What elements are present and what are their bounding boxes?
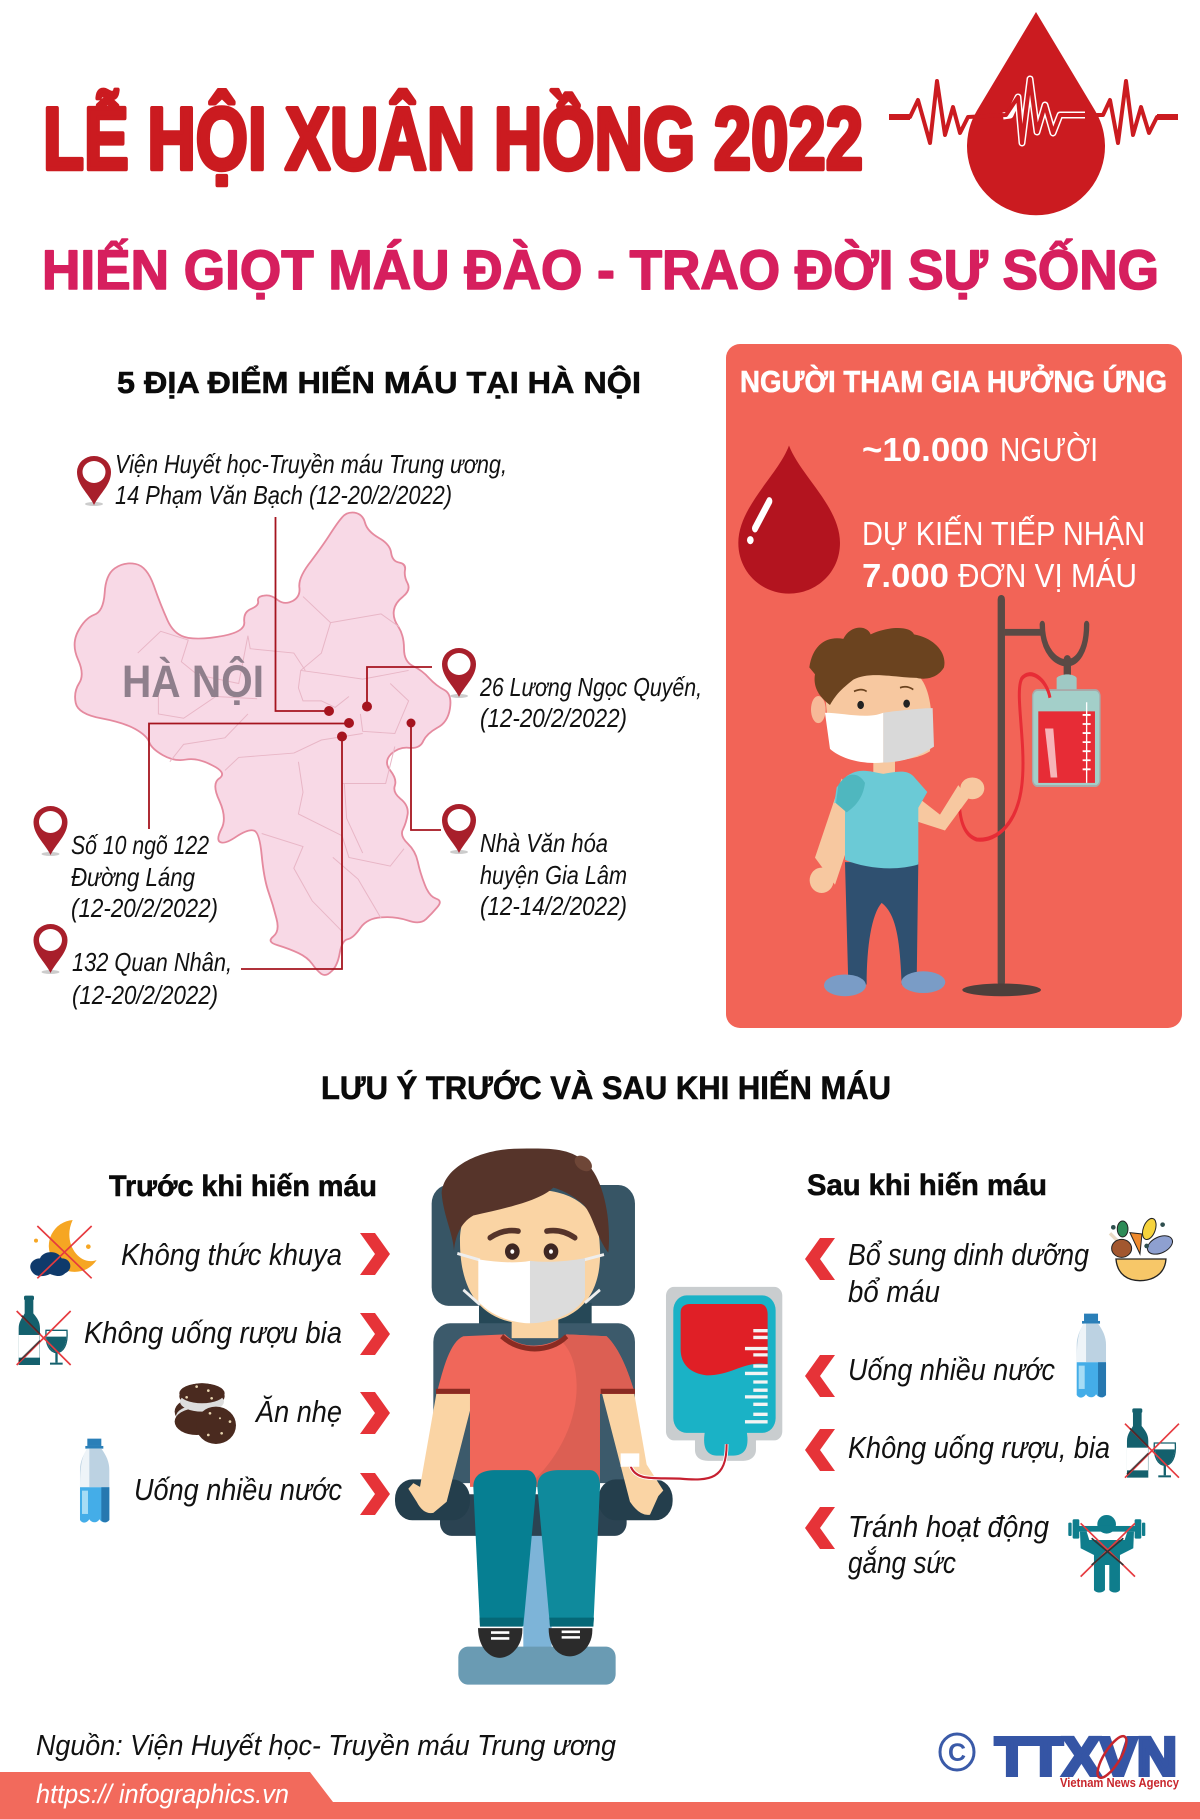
- panel: participants: [726, 344, 1182, 1028]
- stat: blood units: DỰ KIẾN TIẾP NHẬN: [862, 515, 1145, 552]
- location: Viện Huyết học: Viện Huyết học-Truyền máu Trung ương,: [115, 449, 507, 479]
- donor figure: [809, 628, 984, 996]
- map of Hanoi: [75, 512, 450, 975]
- blood bag: [666, 1287, 782, 1461]
- tube and patch: [621, 1444, 727, 1479]
- chair: [395, 1185, 673, 1685]
- location: Đường Láng: (12-20/2/2022): [71, 893, 218, 923]
- logo: TTXVN: TTXVN: [995, 1727, 1177, 1787]
- logo: TTXVN: C: [948, 1739, 966, 1767]
- location: Nhà Văn hóa Gia Lâm: huyện Gia Lâm: [480, 860, 627, 890]
- IV stand: [962, 595, 1087, 996]
- location: Đường Láng: Số 10 ngõ 122: [71, 830, 209, 860]
- icon: drop: [738, 445, 840, 594]
- shirt: [436, 1334, 635, 1487]
- item: no alcohol: Không uống rượu, bia: [848, 1430, 1110, 1465]
- heading: notes before and after donating: LƯU Ý TRƯỚC VÀ SAU KHI HIẾN MÁU: [321, 1070, 891, 1106]
- location: 26 Lương Ngọc Quyến: 26 Lương Ngọc Quyến,: [479, 672, 702, 702]
- item: light meal: Ăn nhẹ: [254, 1394, 342, 1429]
- item: nutrition: [805, 1217, 1175, 1309]
- item: light meal: [175, 1383, 390, 1444]
- item: no alcohol: [17, 1296, 390, 1365]
- footer url: https:// infographics.vn: [36, 1779, 289, 1809]
- stat: participants: NGƯỜI: [1000, 431, 1098, 468]
- subtitle: HIẾN GIỌT MÁU ĐÀO - TRAO ĐỜI SỰ SỐNG: [42, 238, 1159, 301]
- item: drink water: [80, 1439, 390, 1523]
- connector lines and location dots: [149, 517, 441, 969]
- location: Quan Nhân: 132 Quan Nhân,: [72, 947, 232, 977]
- heading: locations: 5 ĐỊA ĐIỂM HIẾN MÁU TẠI HÀ NỘI: [117, 364, 641, 400]
- logo: TTXVN: Vietnam News Agency: [1060, 1776, 1179, 1790]
- illustration: donor with IV stand: [738, 445, 1100, 996]
- location: Nhà Văn hóa Gia Lâm: [442, 804, 627, 921]
- location: Đường Láng: [34, 806, 218, 923]
- item: nutrition: Bổ sung dinh dưỡng: [848, 1237, 1089, 1272]
- subheading: after: Sau khi hiến máu: [807, 1169, 1047, 1202]
- location: Viện Huyết học: 14 Phạm Văn Bạch (12-20/2/2022): [115, 480, 452, 510]
- item: avoid exertion: Tránh hoạt động: [848, 1509, 1049, 1544]
- item: nutrition: bổ máu: [848, 1274, 940, 1309]
- icon: blood drop with heartbeat line: [889, 12, 1178, 215]
- location: 26 Lương Ngọc Quyến: (12-20/2/2022): [480, 703, 627, 733]
- item: drink water: Uống nhiều nước: [134, 1472, 342, 1507]
- item: no staying up late: [30, 1220, 390, 1278]
- map label: HÀ NỘI: [122, 656, 264, 707]
- title: LỄ HỘI XUÂN HỒNG 2022: [43, 89, 863, 188]
- item: no alcohol: [805, 1408, 1179, 1478]
- subheading: before: Trước khi hiến máu: [109, 1170, 377, 1203]
- location: Nhà Văn hóa Gia Lâm: Nhà Văn hóa: [480, 828, 608, 858]
- location: Quan Nhân: [34, 924, 232, 1010]
- stat: participants: [862, 431, 1098, 468]
- panel: donation locations: [34, 364, 702, 1010]
- item: no staying up late: Không thức khuya: [121, 1237, 342, 1272]
- footer band: [0, 1772, 1200, 1819]
- location: Viện Huyết học: [77, 449, 507, 510]
- stat: blood units: 7.000: [862, 557, 949, 594]
- item: no alcohol: Không uống rượu bia: [84, 1315, 342, 1350]
- trousers and shoes: [473, 1470, 600, 1658]
- stat: participants: ~10.000: [862, 431, 989, 468]
- location: Nhà Văn hóa Gia Lâm: (12-14/2/2022): [480, 891, 627, 921]
- arms: [408, 1392, 663, 1515]
- blood bag: [1033, 674, 1100, 786]
- location: Đường Láng: Đường Láng: [71, 862, 195, 892]
- illustration: seated donor: [395, 1149, 782, 1685]
- stat: blood units: [862, 515, 1145, 594]
- item: drink water: [805, 1314, 1106, 1398]
- item: drink water: Uống nhiều nước: [848, 1352, 1055, 1387]
- source: Nguồn: Viện Huyết học- Truyền máu Trung ương: [36, 1730, 616, 1762]
- panel background: [726, 344, 1182, 1028]
- item: avoid exertion: gắng sức: [848, 1545, 956, 1580]
- item: avoid exertion: [805, 1507, 1145, 1592]
- panel: before donating: [17, 1170, 390, 1523]
- panel: after donating: [805, 1169, 1179, 1592]
- location: Quan Nhân: (12-20/2/2022): [72, 980, 218, 1010]
- head and mask: [442, 1149, 609, 1338]
- location: 26 Lương Ngọc Quyến: [442, 648, 702, 733]
- blood tube: [959, 674, 1050, 840]
- stat: blood units: ĐƠN VỊ MÁU: [958, 557, 1137, 594]
